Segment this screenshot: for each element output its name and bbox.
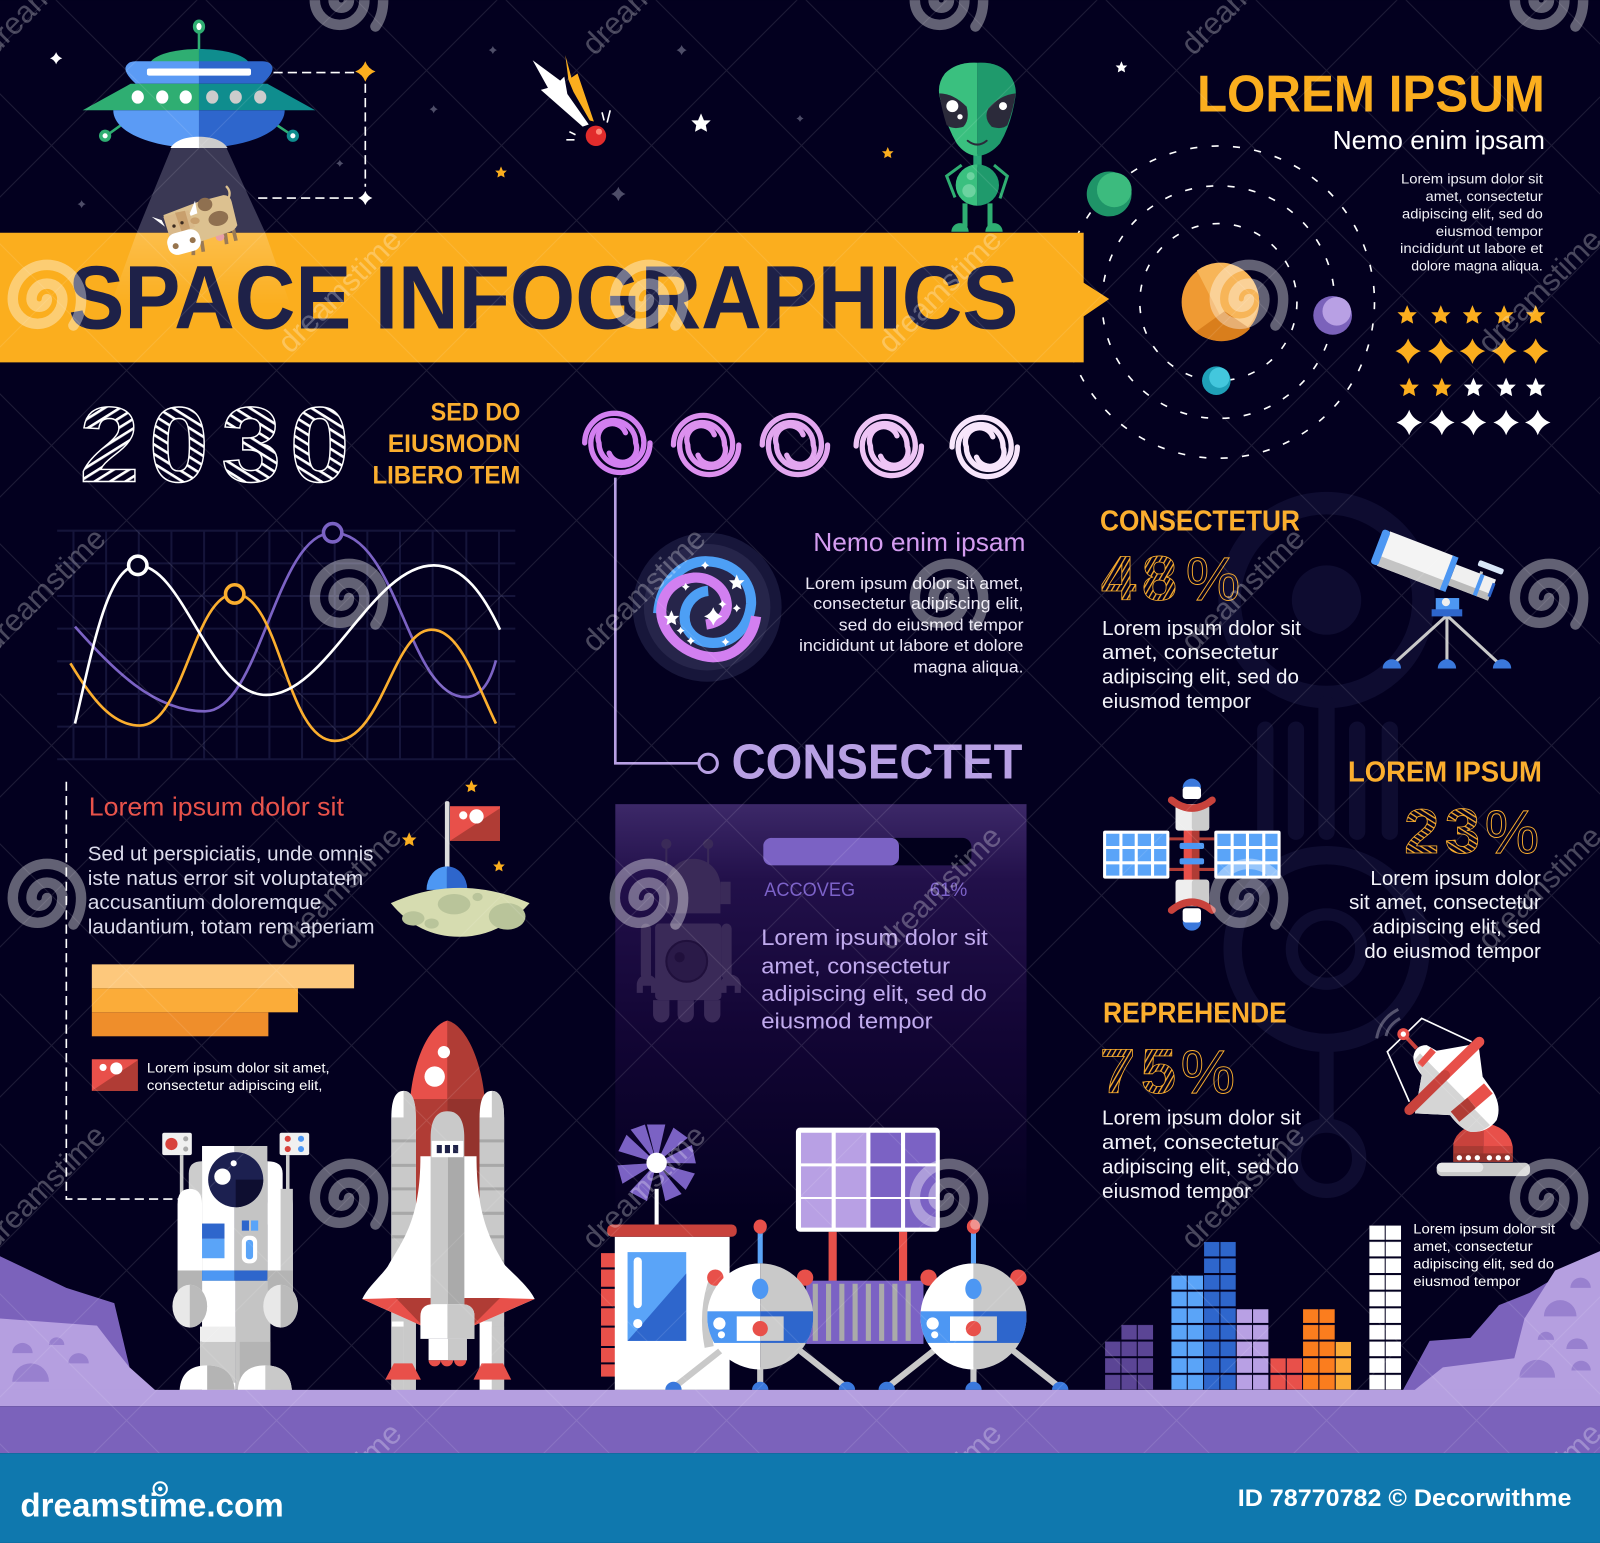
progress label: ACCOVEG xyxy=(764,879,855,901)
watermark: dreamstime xyxy=(271,819,408,956)
text block: lorem ipsum dolor sit: Lorem ipsum dolor sit xyxy=(89,793,344,821)
heading: lorem ipsum: eiusmod tempor xyxy=(1436,224,1543,240)
panel text: eiusmod tempor xyxy=(761,1009,933,1034)
dashed connector with stars xyxy=(258,61,376,205)
illustration: lunar lander right xyxy=(879,1219,1068,1390)
heading: lorem ipsum: amet, consectetur xyxy=(1426,189,1543,205)
heading: sed do: SED DO xyxy=(431,398,520,426)
faint background robot shapes xyxy=(1230,503,1423,1191)
progress label: 61% xyxy=(930,879,967,901)
icon: ghost robot xyxy=(637,839,741,1023)
heading: lorem ipsum xyxy=(1197,65,1545,274)
section: reprehende 75: REPREHENDE xyxy=(1103,998,1287,1030)
section: reprehende 75: eiusmod tempor xyxy=(1102,1181,1251,1203)
text block: nemo enim ipsam: magna aliqua. xyxy=(913,658,1023,677)
heading: lorem ipsum: Nemo enim ipsam xyxy=(1333,127,1545,155)
text block: lorem ipsum dolor sit: accusantium doloremque xyxy=(88,892,321,914)
icon: comet xyxy=(533,55,610,146)
section: lorem ipsum 23: adipiscing elit, sed xyxy=(1372,917,1541,939)
text block: lorem ipsum dolor sit: iste natus error sit voluptatem xyxy=(88,868,363,890)
watermark: dreamstime xyxy=(271,222,408,360)
background stars xyxy=(50,45,1127,208)
panel text xyxy=(761,925,989,1034)
text block: nemo enim ipsam: Lorem ipsum dolor sit amet, xyxy=(805,574,1023,593)
section: lorem ipsum 23: do eiusmod tempor xyxy=(1364,941,1541,963)
watermark: dreamstime xyxy=(575,1118,713,1255)
watermark: dreamstime xyxy=(575,521,713,658)
panel text: Lorem ipsum dolor sit xyxy=(761,925,989,950)
text block: nemo enim ipsam: Nemo enim ipsam xyxy=(813,529,1026,557)
progress label xyxy=(764,879,967,901)
text block: nemo enim ipsam: sed do eiusmod tempor xyxy=(839,616,1024,635)
text block: bottom right: adipiscing elit, sed do xyxy=(1413,1256,1554,1272)
watermark: dreamstime xyxy=(871,819,1008,956)
icon: galaxy xyxy=(633,533,782,682)
panel text: amet, consectetur xyxy=(761,954,951,979)
legend xyxy=(92,1059,330,1094)
section: lorem ipsum 23 xyxy=(1348,757,1542,963)
section: lorem ipsum 23: 23 xyxy=(1404,797,1480,867)
section: consectetur 48: eiusmod tempor xyxy=(1102,691,1251,713)
legend: Lorem ipsum dolor sit amet, xyxy=(147,1061,330,1077)
legend: consectetur adipiscing elit, xyxy=(147,1078,322,1094)
heading: lorem ipsum: adipiscing elit, sed do xyxy=(1402,206,1543,222)
text block: bottom right xyxy=(1413,1222,1555,1290)
icon: cow xyxy=(152,186,237,257)
equalizer bar chart xyxy=(1102,1219,1404,1390)
icon: satellite xyxy=(1103,779,1281,931)
ground xyxy=(0,1390,1600,1453)
title: SPACE INFOGRAPHICS xyxy=(68,249,1018,349)
text block: lorem ipsum dolor sit: laudantium, totam rem aperiam xyxy=(88,917,374,939)
section: consectetur 48: % xyxy=(1186,545,1240,613)
bar chart: stacked orange xyxy=(92,964,354,1036)
rocks: left xyxy=(0,1256,157,1392)
section: lorem ipsum 23: Lorem ipsum dolor xyxy=(1370,868,1541,890)
heading: consectet: CONSECTET xyxy=(732,736,1023,790)
footer xyxy=(0,1453,1600,1543)
section: lorem ipsum 23: % xyxy=(1485,798,1539,866)
icon: windmill xyxy=(617,1125,696,1225)
footer logo: dreamstime.com xyxy=(20,1487,284,1524)
watermark: dreamstime xyxy=(1174,521,1311,658)
section: reprehende 75 xyxy=(1100,998,1301,1203)
watermark: dreamstime xyxy=(1174,1118,1311,1255)
watermark: dreamstime xyxy=(871,222,1008,360)
text block: bottom right: Lorem ipsum dolor sit xyxy=(1413,1222,1555,1238)
text block: nemo enim ipsam: consectetur adipiscing elit, xyxy=(813,594,1023,613)
section: reprehende 75: 75 xyxy=(1100,1037,1176,1107)
text block: lorem ipsum dolor sit xyxy=(88,793,374,939)
text block: lorem ipsum dolor sit: Sed ut perspiciatis, unde omnis xyxy=(88,843,373,865)
section: lorem ipsum 23: LOREM IPSUM xyxy=(1348,757,1542,789)
text block: nemo enim ipsam xyxy=(799,529,1026,677)
section: consectetur 48 xyxy=(1100,506,1301,713)
heading: sed do: LIBERO TEM xyxy=(372,462,520,490)
illustration: UFO and beam xyxy=(83,19,315,233)
illustration: solar panel xyxy=(796,1128,940,1284)
panel text: adipiscing elit, sed do xyxy=(761,981,987,1006)
section: consectetur 48: 48 xyxy=(1101,544,1177,614)
section: reprehende 75: amet, consectetur xyxy=(1102,1132,1279,1154)
illustration: astronaut xyxy=(162,1133,309,1390)
section: consectetur 48: adipiscing elit, sed do xyxy=(1102,667,1299,689)
dashed left connector xyxy=(66,782,179,1199)
year 2030: 2030 xyxy=(80,385,349,505)
banner xyxy=(0,233,1109,362)
icon: telescope xyxy=(1370,529,1511,668)
rocks: right xyxy=(1402,1251,1600,1392)
icon: moon with flag xyxy=(391,780,530,937)
heading: lorem ipsum: LOREM IPSUM xyxy=(1197,65,1545,123)
section: consectetur 48: amet, consectetur xyxy=(1102,642,1279,664)
text block: nemo enim ipsam: incididunt ut labore et dolore xyxy=(799,636,1023,655)
heading: sed do xyxy=(372,398,520,490)
galaxy row with connector xyxy=(585,413,1017,773)
icon: alien xyxy=(939,63,1016,232)
illustration: space shuttle xyxy=(362,1020,535,1390)
connector tube xyxy=(806,1281,923,1344)
heading: sed do: EIUSMODN xyxy=(388,430,520,458)
diagram: solar system xyxy=(1062,146,1374,458)
illustration: base building xyxy=(601,1225,737,1390)
panel: accoveg xyxy=(615,804,1027,1225)
section: reprehende 75: Lorem ipsum dolor sit xyxy=(1102,1108,1301,1130)
section: lorem ipsum 23: sit amet, consectetur xyxy=(1349,892,1541,914)
heading: lorem ipsum: dolore magna aliqua. xyxy=(1411,258,1543,274)
line chart xyxy=(57,524,515,760)
section: consectetur 48: CONSECTETUR xyxy=(1100,506,1300,538)
text block: bottom right: amet, consectetur xyxy=(1413,1239,1533,1255)
heading: lorem ipsum: Lorem ipsum dolor sit xyxy=(1401,172,1543,188)
icon: radar dish xyxy=(1377,1009,1530,1176)
illustration: lunar lander left xyxy=(665,1219,855,1390)
rating stars xyxy=(1395,305,1551,435)
section: reprehende 75: adipiscing elit, sed do xyxy=(1102,1157,1299,1179)
text block: bottom right: eiusmod tempor xyxy=(1413,1274,1521,1290)
progress bar xyxy=(763,838,971,865)
section: reprehende 75: % xyxy=(1181,1038,1235,1106)
UFO beam over banner xyxy=(110,233,291,306)
heading: lorem ipsum: incididunt ut labore et xyxy=(1400,241,1543,257)
image id: ID 78770782 © Decorwithme xyxy=(1238,1485,1571,1512)
section: consectetur 48: Lorem ipsum dolor sit xyxy=(1102,618,1301,640)
